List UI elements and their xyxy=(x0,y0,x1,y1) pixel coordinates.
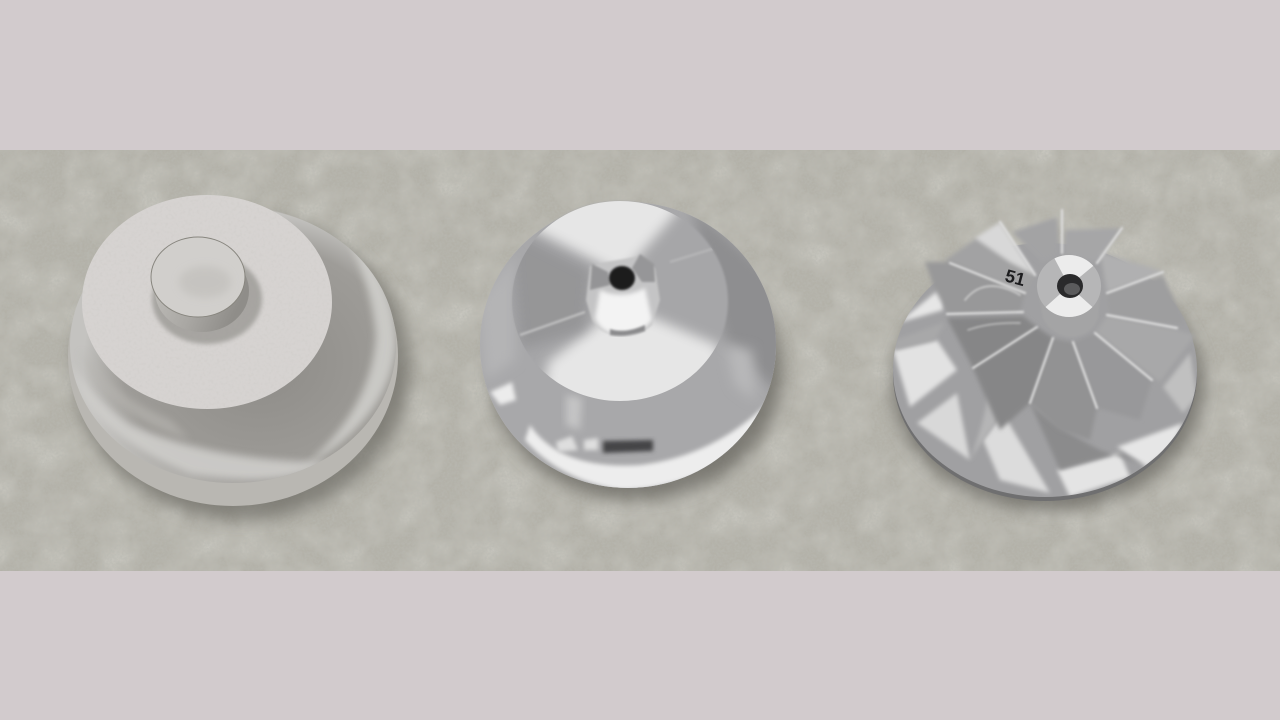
photo: three stages of an impeller xyxy=(0,150,1280,571)
part: rough cast blank xyxy=(68,195,410,520)
impeller upper blades xyxy=(925,217,1195,440)
impeller hub xyxy=(1037,255,1101,317)
part: turned blank xyxy=(470,190,790,500)
impeller part marking: 51 xyxy=(1003,266,1027,290)
surface: speckled grey table xyxy=(0,150,1280,571)
impeller base disc with bright floor patches xyxy=(890,235,1200,505)
impeller blade edges xyxy=(947,210,1177,408)
part: finished impeller xyxy=(890,210,1204,510)
